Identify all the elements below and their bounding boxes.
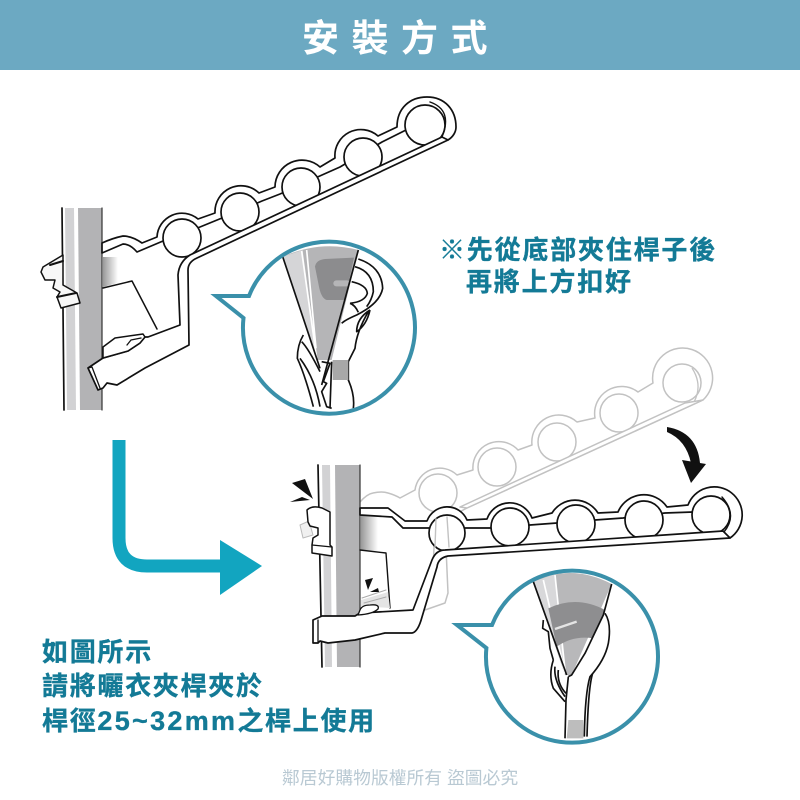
shadow and paper panel	[103, 257, 157, 329]
bubble dark patch	[315, 258, 354, 300]
bottom holes	[429, 496, 730, 551]
bottom upper clip	[307, 507, 332, 556]
bottom lower clip ring	[358, 605, 378, 615]
bottom hanger illustration	[300, 465, 742, 667]
bottom pole	[318, 465, 360, 667]
copyright footer: 鄰居好購物版權所有 盜圖必究	[282, 768, 518, 788]
title: 安裝方式	[302, 18, 500, 59]
ghost hanger: before rotation	[360, 348, 713, 610]
clip eye	[103, 334, 145, 358]
usage text: 請將曬衣夾桿夾於	[42, 671, 264, 701]
bubble outline two	[457, 571, 658, 743]
ghost seen through hole	[435, 517, 449, 547]
title banner	[0, 0, 800, 70]
usage text	[42, 637, 376, 736]
note text: ※先從底部夾住桿子後	[439, 235, 717, 265]
bubble dark band	[548, 602, 605, 647]
usage text: 如圖所示	[42, 637, 153, 667]
bottom shadow and paper	[360, 515, 390, 608]
bubble: top detail	[216, 242, 415, 414]
bubble strap lines	[566, 613, 609, 738]
pressure marks	[290, 479, 379, 592]
bottom hanger chain	[360, 487, 742, 538]
note text	[439, 235, 717, 297]
end crescent	[722, 497, 731, 532]
usage text: 桿徑25~32mm之桿上使用	[42, 706, 376, 736]
pole	[62, 208, 102, 410]
note text: 再將上方扣好	[466, 267, 633, 297]
ghost clip	[300, 521, 313, 538]
step arrow	[119, 440, 262, 595]
bubble clip lines	[330, 258, 383, 408]
upper clip	[41, 255, 80, 308]
bubble: bottom detail	[457, 571, 658, 743]
end crescent top	[430, 102, 446, 137]
top hanger illustration	[41, 97, 456, 410]
arm and lower clip	[88, 137, 448, 390]
bottom arm and bar	[313, 531, 730, 643]
hanger holes	[163, 105, 445, 257]
bubble outline	[216, 242, 415, 414]
hanger chain	[102, 97, 456, 253]
rotation arrow	[667, 427, 706, 483]
bubble wedge	[283, 246, 358, 360]
bubble wedge two	[533, 573, 612, 675]
